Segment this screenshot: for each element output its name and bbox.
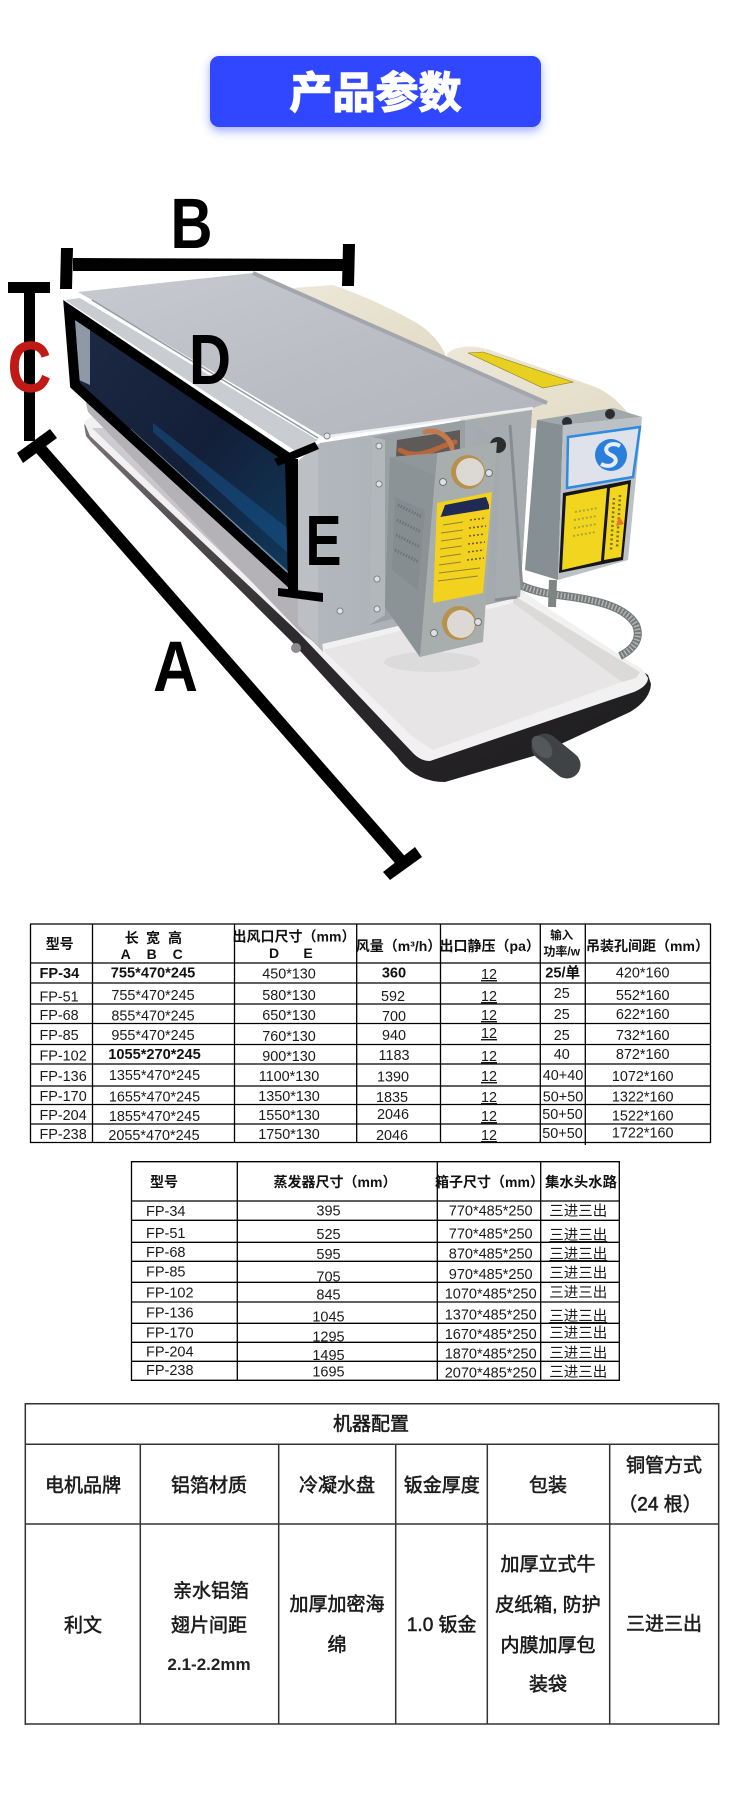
table 2 row FP-34: FP-34 <box>146 1204 186 1220</box>
table 1 header row: D <box>269 945 279 961</box>
table 2 row FP-170: 1670*485*250 <box>445 1327 537 1343</box>
table 3 header row: 铜管方式 <box>626 1455 702 1477</box>
table 2 row FP-34: 395 <box>316 1204 341 1220</box>
table 2 row FP-68: 870*485*250 <box>449 1246 533 1262</box>
table 2 row FP-85: 970*485*250 <box>449 1267 533 1283</box>
table 1 row FP-136 <box>40 1068 674 1086</box>
table 1 row FP-204: 1550*130 <box>258 1108 320 1124</box>
table 1 row FP-85: 732*160 <box>616 1028 670 1044</box>
table 1 row FP-102: 1183 <box>379 1048 409 1064</box>
table 1 row FP-34: 12 <box>481 967 497 983</box>
table 1 row FP-170: 1835 <box>376 1090 408 1106</box>
table 1 row FP-204: 2046 <box>377 1107 409 1123</box>
table 1 row FP-170: FP-170 <box>40 1089 87 1105</box>
table 1 row FP-34: 420*160 <box>616 966 670 982</box>
table 1 row FP-238: 1722*160 <box>612 1126 674 1142</box>
table 1 row FP-136: FP-136 <box>40 1069 87 1085</box>
table 1 row FP-68: 855*470*245 <box>111 1009 195 1025</box>
table 1 row FP-51: 552*160 <box>616 988 670 1004</box>
table 3 title: 机器配置 <box>333 1413 409 1435</box>
table 3 values row: 三进三出 <box>626 1613 702 1635</box>
table 1 row FP-34 <box>40 965 670 983</box>
specification table 2 <box>131 1161 620 1382</box>
table 1 row FP-170: 1655*470*245 <box>109 1090 200 1106</box>
table 1 row FP-51: 12 <box>481 989 497 1005</box>
table 1 row FP-238: FP-238 <box>40 1127 87 1143</box>
drain pipe <box>528 732 567 765</box>
table 1 row FP-102: 12 <box>481 1049 497 1065</box>
fin material cell: 翅片间距 <box>171 1615 247 1637</box>
table 2 row FP-68: 595 <box>316 1247 341 1263</box>
table 1 row FP-204: 1522*160 <box>612 1109 674 1125</box>
table 3 header row <box>45 1455 702 1516</box>
table 2 row FP-136 <box>146 1306 607 1326</box>
table 1 header row: 功率/w <box>543 944 581 959</box>
table 1 row FP-170: 12 <box>481 1090 497 1106</box>
table 1 row FP-85 <box>40 1026 670 1045</box>
electrical control box <box>525 408 642 580</box>
table 1 row FP-136: 12 <box>481 1069 497 1085</box>
table 1 header row: 长 <box>125 930 139 946</box>
table 1 row FP-68: 650*130 <box>262 1008 316 1024</box>
dimension marker E <box>278 459 342 602</box>
table 1 row FP-238: 12 <box>481 1128 497 1144</box>
table 1 row FP-85: 760*130 <box>262 1029 316 1045</box>
table 1 row FP-102: 900*130 <box>262 1049 316 1065</box>
table 2 row FP-136: 1045 <box>312 1310 345 1326</box>
table 1 header row: B <box>147 946 157 962</box>
dimension marker D: outlet outline <box>69 310 319 585</box>
table 2 header row: 蒸发器尺寸（mm） <box>274 1174 396 1190</box>
table 1 row FP-204 <box>40 1107 674 1125</box>
table 3 header row: 电机品牌 <box>45 1474 121 1496</box>
table 1 row FP-102 <box>40 1047 670 1065</box>
table 1 row FP-238: 50+50 <box>542 1126 583 1142</box>
table 1 row FP-51: FP-51 <box>40 990 79 1006</box>
table 1 header row: 高 <box>168 930 182 946</box>
table 1 row FP-204: 12 <box>481 1109 497 1125</box>
rear motor housing <box>293 285 446 360</box>
table 3 header row: （24 根） <box>618 1494 702 1516</box>
dimension marker C <box>8 282 52 441</box>
dimension marker B: B <box>170 185 212 264</box>
title text: 产品参数 <box>290 70 462 118</box>
table 3 header row: 铝箔材质 <box>171 1474 247 1496</box>
table 2 row FP-51: FP-51 <box>146 1226 186 1242</box>
front motor housing with yellow label <box>447 347 630 430</box>
table 2 row FP-102: 三进三出 <box>549 1285 607 1302</box>
table 2 row FP-238: 1695 <box>312 1365 345 1381</box>
packaging cell: 装袋 <box>529 1674 567 1696</box>
table 1 row FP-238 <box>40 1126 674 1144</box>
lower cap <box>442 606 476 640</box>
table 2 row FP-51: 525 <box>316 1227 341 1243</box>
table 1 row FP-102: 872*160 <box>616 1047 670 1063</box>
dimension marker A: A <box>153 628 198 707</box>
table 1 row FP-51: 592 <box>381 989 405 1005</box>
table 3 values row <box>64 1554 702 1696</box>
condensate tray cell: 绵 <box>327 1634 347 1656</box>
fin material cell: 2.1-2.2mm <box>167 1655 251 1674</box>
table 2 row FP-51: 770*485*250 <box>449 1226 533 1242</box>
packaging cell: 内膜加厚包 <box>500 1635 596 1657</box>
condensate tray cell: 加厚加密海 <box>289 1594 385 1616</box>
dimension marker A <box>17 429 422 880</box>
table 1 row FP-68: 25 <box>554 1007 570 1023</box>
table 3 header row: 包装 <box>529 1474 567 1496</box>
table 2 row FP-34 <box>146 1203 607 1220</box>
table 1 row FP-51: 25 <box>554 986 570 1002</box>
table 1 row FP-85: 12 <box>481 1026 497 1042</box>
machine configuration table <box>25 1403 719 1725</box>
table 1 row FP-85: 955*470*245 <box>111 1028 195 1044</box>
table 2 row FP-170: 1295 <box>312 1330 345 1346</box>
table 2 row FP-51 <box>146 1226 607 1244</box>
condensate tray cell <box>289 1594 385 1656</box>
table 1 row FP-238: 2046 <box>376 1128 408 1144</box>
cabinet side panel <box>297 410 532 645</box>
table 2 row FP-204 <box>146 1345 607 1364</box>
table 1 row FP-204: 50+50 <box>542 1107 583 1123</box>
black and yellow wiring label <box>559 480 631 573</box>
table 1 row FP-68: 12 <box>481 1008 497 1024</box>
table 1 row FP-238: 2055*470*245 <box>108 1128 200 1144</box>
table 1 row FP-34: 360 <box>382 966 406 982</box>
dimension marker C: C <box>8 328 52 408</box>
yellow warning label <box>433 492 492 603</box>
table 2 row FP-34: 三进三出 <box>549 1203 607 1220</box>
table 1 row FP-85: 25 <box>554 1028 570 1044</box>
table 1 header row: A <box>121 946 131 962</box>
table 2 row FP-34: 770*485*250 <box>449 1204 533 1220</box>
table 2 row FP-204: 1870*485*250 <box>445 1346 537 1362</box>
table 2 row FP-238: FP-238 <box>146 1363 194 1379</box>
header box with caps and warning label <box>385 442 497 657</box>
table 1 row FP-51: 580*130 <box>262 988 316 1004</box>
packaging cell: 加厚立式牛 <box>500 1554 596 1576</box>
dimension marker D: outlet outline: D <box>189 321 231 400</box>
table 1 row FP-136: 1100*130 <box>259 1069 319 1085</box>
cabinet top panel <box>78 273 547 439</box>
table 1 header row: 宽 <box>146 930 160 946</box>
table 1 grid <box>30 924 711 1145</box>
table 3 header row: 冷凝水盘 <box>299 1474 375 1496</box>
table 1 header row: 型号 <box>46 936 74 952</box>
table 2 row FP-85: FP-85 <box>146 1265 186 1281</box>
table 1 row FP-34: 450*130 <box>262 966 316 982</box>
table 1 header row: 输入 <box>550 928 574 942</box>
table 1 row FP-68 <box>40 1007 670 1025</box>
table 1 row FP-102: FP-102 <box>40 1049 87 1065</box>
table 1 header row <box>46 928 709 962</box>
table 1 row FP-34: FP-34 <box>40 966 80 982</box>
table 2 row FP-170: 三进三出 <box>549 1325 607 1342</box>
table 2 row FP-170: FP-170 <box>146 1326 194 1342</box>
dimension marker E: E <box>306 502 342 581</box>
table 2 row FP-85 <box>146 1265 607 1286</box>
table 1 header row: E <box>303 945 313 961</box>
outlet interior <box>70 310 293 585</box>
table 1 header row: 出风口尺寸（mm） <box>233 928 355 944</box>
table 1 row FP-170 <box>40 1089 674 1106</box>
packaging cell <box>495 1554 601 1696</box>
table 2 row FP-204: 1495 <box>312 1348 345 1364</box>
table 2 row FP-170 <box>146 1325 607 1346</box>
table 1 row FP-68: 700 <box>382 1009 406 1025</box>
table 3 header row: 钣金厚度 <box>404 1474 480 1496</box>
table 2 row FP-68 <box>146 1245 607 1263</box>
dimension marker B <box>60 185 355 289</box>
table 1 row FP-204: 1855*470*245 <box>109 1109 200 1125</box>
table 3 values row: 利文 <box>64 1615 102 1637</box>
table 2 row FP-102: 1070*485*250 <box>445 1286 537 1302</box>
table 1 row FP-136: 1355*470*245 <box>109 1068 200 1084</box>
table 2 header row: 集水头水路 <box>545 1173 618 1191</box>
logo label <box>567 427 640 488</box>
table 1 row FP-85: FP-85 <box>40 1028 79 1044</box>
table 2 header row <box>150 1173 618 1191</box>
table 1 header row: C <box>173 946 183 962</box>
flexible conduit <box>520 580 638 656</box>
specification table 1 <box>30 924 711 1145</box>
table 1 row FP-170: 1350*130 <box>258 1089 320 1105</box>
flange strip <box>65 298 318 452</box>
product photo: fan coil unit <box>8 185 651 880</box>
table 2 row FP-204: 三进三出 <box>549 1345 607 1362</box>
table 1 row FP-68: FP-68 <box>40 1008 79 1024</box>
table 2 row FP-238 <box>146 1363 607 1382</box>
table 1 row FP-51: 755*470*245 <box>111 988 195 1004</box>
table 1 row FP-170: 1322*160 <box>612 1090 674 1106</box>
table 1 row FP-51 <box>40 986 670 1006</box>
table 1 row FP-34: 25/单 <box>545 965 580 982</box>
table 1 row FP-136: 40+40 <box>543 1068 583 1084</box>
table 2 row FP-238: 三进三出 <box>549 1364 607 1381</box>
table 2 row FP-102 <box>146 1285 607 1303</box>
table 2 row FP-204: FP-204 <box>146 1345 194 1361</box>
table 1 row FP-136: 1072*160 <box>612 1069 674 1085</box>
fin material cell: 亲水铝箔 <box>173 1580 249 1602</box>
table 3 values row: 1.0 钣金 <box>407 1614 477 1636</box>
table 2 row FP-51: 三进三出 <box>549 1227 607 1244</box>
table 1 row FP-34: 755*470*245 <box>111 966 195 982</box>
table 2 row FP-68: 三进三出 <box>549 1246 607 1263</box>
drain tray <box>84 410 651 782</box>
table 2 row FP-238: 2070*485*250 <box>445 1366 537 1382</box>
table 2 row FP-102: FP-102 <box>146 1286 194 1302</box>
title button <box>210 56 541 127</box>
table 2 header row: 箱子尺寸（mm） <box>435 1174 544 1190</box>
table 2 row FP-85: 705 <box>316 1270 341 1286</box>
table 2 header row: 型号 <box>150 1174 178 1190</box>
table 1 row FP-85: 940 <box>382 1028 406 1044</box>
table 1 header row: 吊装孔间距（mm） <box>586 938 709 954</box>
table 2 row FP-136: 三进三出 <box>549 1308 607 1325</box>
copper pipes <box>395 430 460 475</box>
table 1 row FP-68: 622*160 <box>616 1007 670 1023</box>
table 1 row FP-102: 1055*270*245 <box>108 1047 201 1063</box>
table 1 row FP-204: FP-204 <box>40 1108 87 1124</box>
table 2 row FP-68: FP-68 <box>146 1245 186 1261</box>
table 3 grid <box>25 1403 719 1725</box>
fin material cell <box>167 1580 251 1674</box>
table 1 row FP-238: 1750*130 <box>258 1127 320 1143</box>
table 2 row FP-136: 1370*485*250 <box>445 1307 537 1323</box>
table 2 row FP-85: 三进三出 <box>549 1265 607 1282</box>
table 1 row FP-136: 1390 <box>377 1070 409 1086</box>
table 1 header row: 风量（m³/h） <box>356 938 441 954</box>
upper cap <box>451 455 485 489</box>
table 2 row FP-136: FP-136 <box>146 1306 194 1322</box>
table 1 row FP-102: 40 <box>554 1047 570 1063</box>
duct underside <box>82 385 318 645</box>
table 1 header row: 出口静压（pa） <box>440 938 540 954</box>
table 2 grid <box>131 1161 620 1381</box>
table 1 row FP-170: 50+50 <box>543 1090 583 1106</box>
table 2 row FP-102: 845 <box>316 1287 341 1303</box>
packaging cell: 皮纸箱, 防护 <box>495 1594 601 1616</box>
